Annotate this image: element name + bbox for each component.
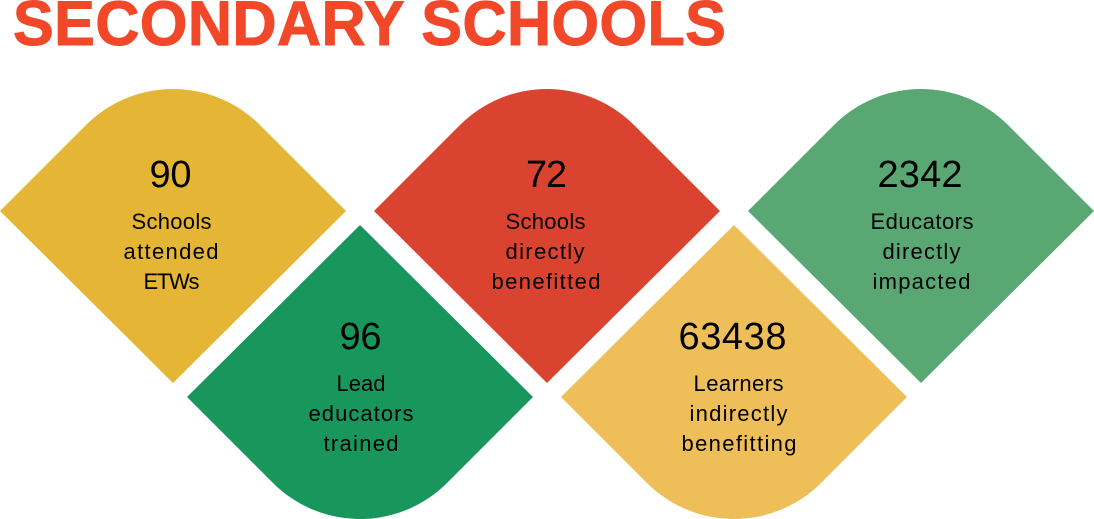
label: schools directly benefitted bbox=[492, 209, 600, 294]
label: schools directly benefitted: Schools bbox=[506, 209, 586, 234]
label: lead educators trained: trained bbox=[324, 431, 398, 456]
label: schools attended ETWs: ETWs bbox=[144, 269, 200, 294]
label: educators directly impacted: directly bbox=[882, 239, 960, 264]
label: schools attended ETWs: Schools bbox=[132, 209, 212, 234]
label: schools attended ETWs bbox=[124, 209, 218, 294]
number: 96: 96 bbox=[340, 316, 382, 358]
label: lead educators trained bbox=[308, 371, 414, 456]
label: educators directly impacted: impacted bbox=[872, 269, 970, 294]
label: schools directly benefitted: benefitted bbox=[492, 269, 600, 294]
panel: lead educators trained bbox=[187, 225, 533, 519]
panel: schools attended ETWs bbox=[0, 89, 346, 383]
label: learners indirectly benefitting: benefitting bbox=[682, 431, 796, 456]
label: learners indirectly benefitting: Learners bbox=[694, 371, 784, 396]
label: learners indirectly benefitting: indirectly bbox=[690, 401, 788, 426]
label: educators directly impacted: Educators bbox=[870, 209, 974, 234]
number: 72: 72 bbox=[526, 154, 567, 196]
label: schools directly benefitted: directly bbox=[506, 239, 584, 264]
number: 2342: 2342 bbox=[878, 154, 962, 196]
number: 90: 90 bbox=[150, 154, 192, 196]
panel: schools directly benefitted bbox=[374, 89, 720, 383]
label: educators directly impacted bbox=[870, 209, 974, 294]
label: lead educators trained: Lead bbox=[336, 371, 386, 396]
panel: learners indirectly benefitting bbox=[561, 225, 907, 519]
number: 63438: 63438 bbox=[678, 316, 786, 358]
label: lead educators trained: educators bbox=[308, 401, 414, 426]
label: learners indirectly benefitting bbox=[682, 371, 796, 456]
panel: educators directly impacted bbox=[748, 89, 1094, 383]
label: schools attended ETWs: attended bbox=[124, 239, 218, 264]
